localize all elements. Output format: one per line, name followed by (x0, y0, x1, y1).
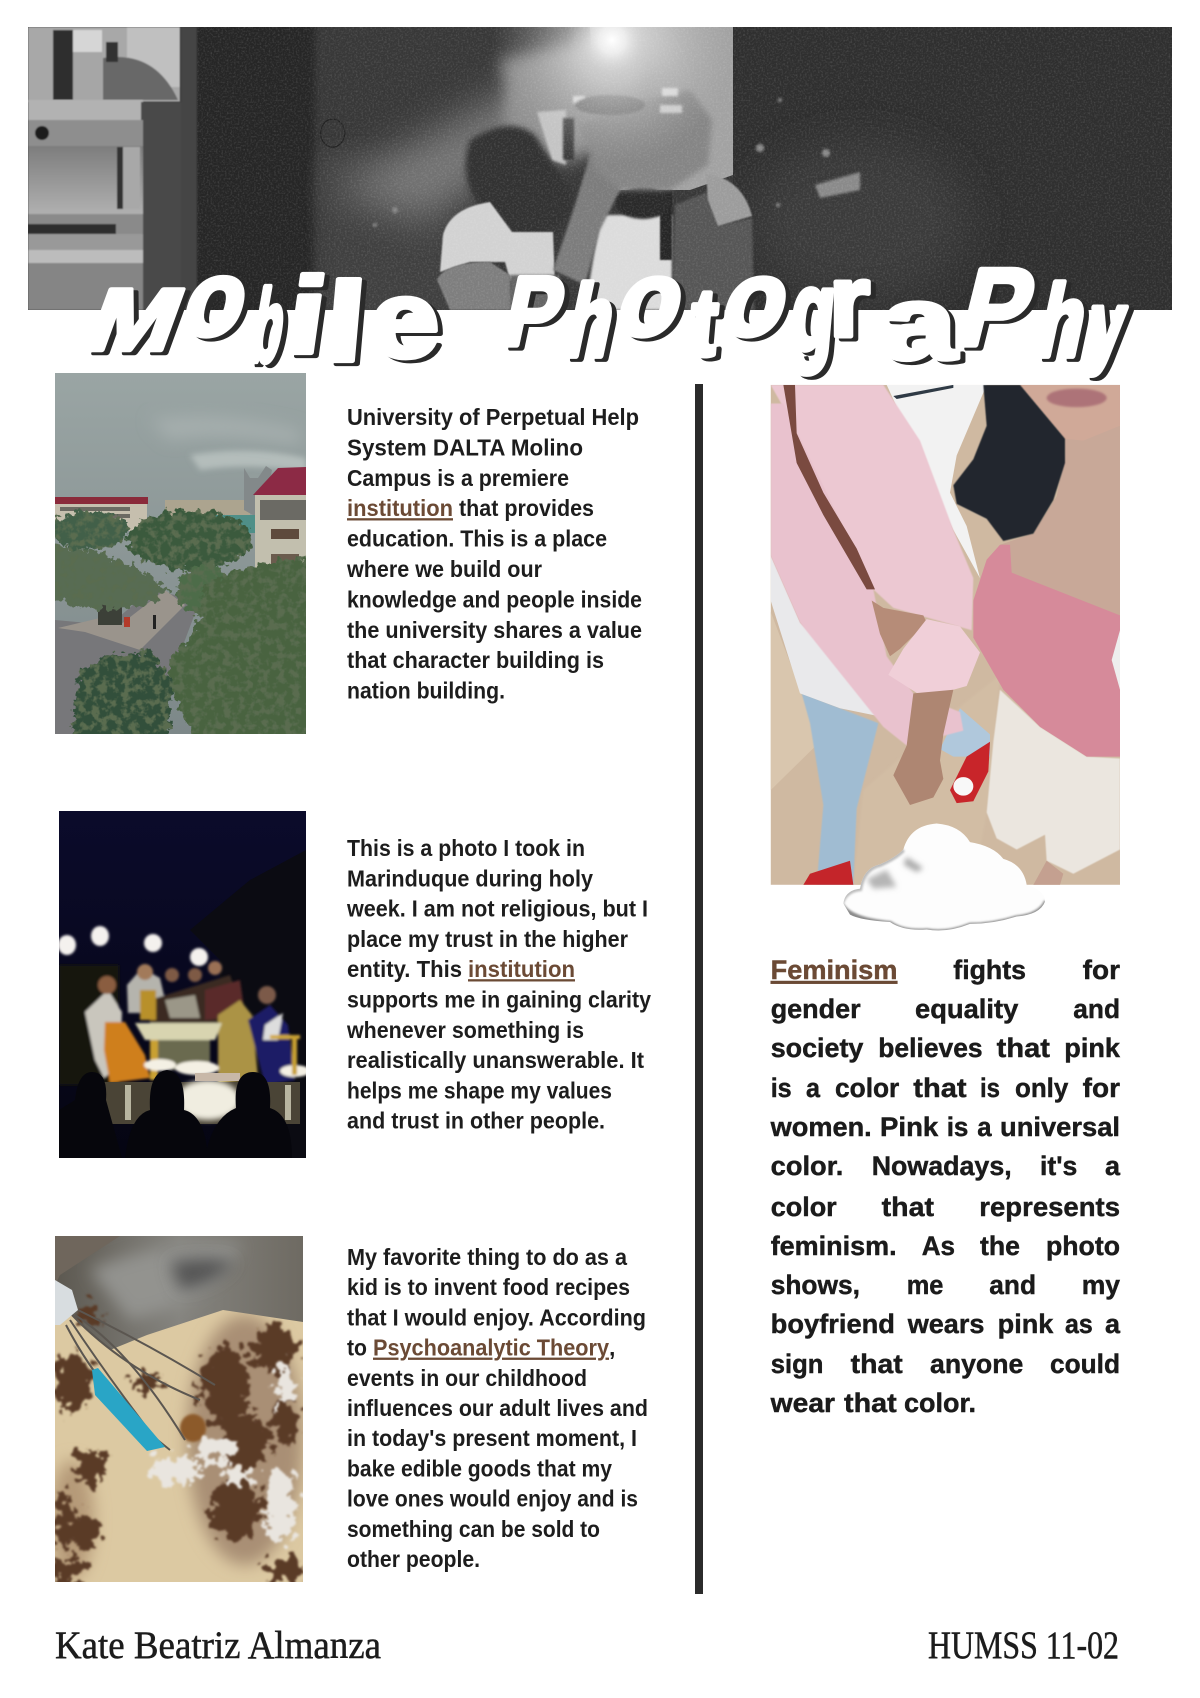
text: feminism paragraph, justified: wears (907, 1309, 984, 1339)
text: feminism paragraph, justified: a (1105, 1309, 1121, 1339)
title: Mobile Photography (75, 238, 1137, 389)
skin chest and face (1000, 385, 1120, 619)
hands with camera (580, 90, 712, 190)
brown sugar clumps (43, 1303, 305, 1582)
text: baking paragraph: in today's present moment, I (347, 1425, 637, 1451)
text: Marinduque paragraph: helps me shape my values (347, 1077, 612, 1103)
photo: baking bowl with whisk (43, 1236, 305, 1582)
text: feminism paragraph, justified: wear (770, 1388, 836, 1418)
title: Mobile Photography: b (244, 270, 293, 384)
text: feminism paragraph, justified: anyone (930, 1349, 1023, 1379)
float base (90, 1082, 300, 1124)
footer: class section: HUMSS 11-02 (928, 1624, 1119, 1667)
text: university paragraph: institution (347, 495, 453, 521)
text: university paragraph: that character building is (347, 647, 604, 673)
title: Mobile Photography: P (954, 248, 1052, 372)
bright window (887, 385, 987, 578)
text: feminism paragraph, justified: the (980, 1231, 1020, 1261)
text: feminism paragraph, justified: shows, (771, 1270, 860, 1300)
lamps (58, 926, 208, 966)
red sneaker (950, 742, 990, 803)
flour patches (150, 1363, 296, 1541)
title: Mobile Photography: l (319, 260, 372, 386)
photo: university campus (50, 373, 310, 740)
blue robe disciple (248, 1005, 295, 1085)
text: feminism paragraph, justified: believes (878, 1033, 983, 1063)
rolled cuff (888, 619, 980, 697)
text: baking paragraph (347, 1244, 648, 1572)
right dark wall (733, 27, 1172, 310)
crochet pink top (973, 545, 1120, 757)
text: feminism paragraph, justified: that (844, 1388, 897, 1418)
icon: white cloud (842, 824, 1047, 932)
left cabinet window (28, 27, 180, 102)
title: Mobile Photography: o (611, 243, 704, 361)
upper head glow area (500, 93, 592, 169)
title: Mobile Photography: t (691, 272, 727, 379)
title: Mobile Photography: a (880, 264, 958, 381)
text: Marinduque paragraph: institution (468, 956, 575, 982)
hand on arm (872, 600, 927, 656)
text: feminism paragraph, justified: could (1050, 1349, 1120, 1379)
text: feminism paragraph, justified: boyfriend (771, 1309, 895, 1339)
text: feminism paragraph, justified: is (771, 1073, 792, 1103)
title: Mobile Photography: P (500, 260, 578, 369)
title: Mobile Photography: g (786, 249, 841, 375)
title: Mobile Photography: b (249, 273, 298, 387)
text: feminism paragraph, justified: universal (1000, 1112, 1120, 1142)
text: Marinduque paragraph: whenever something is (346, 1017, 584, 1043)
floor (771, 385, 1120, 885)
vertical divider (695, 384, 703, 1594)
text: feminism paragraph, justified (770, 955, 1121, 1418)
text: feminism paragraph, justified: women. (770, 1112, 872, 1142)
text: feminism paragraph, justified: sign (771, 1349, 823, 1379)
footer: author name: Kate Beatriz Almanza (55, 1624, 381, 1667)
text: Marinduque paragraph: This is a photo I took in (347, 835, 585, 861)
text: university paragraph: education. This is a place (347, 526, 607, 552)
text: feminism paragraph, justified: fights (953, 955, 1026, 985)
silhouettes of spectators (59, 1070, 286, 1140)
title: Mobile Photography: h (1034, 267, 1103, 381)
title: Mobile Photography: o (716, 243, 809, 361)
text: baking paragraph: that I would enjoy. According (347, 1304, 646, 1330)
lit candle bowls (144, 1059, 176, 1071)
text: Marinduque paragraph: supports me in gaining clarity (347, 986, 651, 1012)
left arm (437, 262, 512, 310)
title: Mobile Photography: M (80, 273, 202, 372)
text: feminism paragraph, justified: a (806, 1073, 821, 1103)
text: baking paragraph: , (609, 1335, 615, 1361)
forearm (553, 155, 625, 285)
title: Mobile Photography: P (949, 245, 1047, 369)
title: Mobile Photography: l (324, 263, 377, 389)
right sleeve (706, 174, 752, 226)
pink shirt upper sleeve (771, 385, 973, 630)
text: baking paragraph: something can be sold to (347, 1516, 600, 1542)
orange robe disciple (104, 1022, 150, 1083)
cabinet body (28, 27, 197, 310)
text: feminism paragraph, justified: pink (998, 1309, 1054, 1339)
text: Marinduque paragraph (346, 835, 651, 1134)
whisk handle (55, 1280, 78, 1325)
text: feminism paragraph, justified: that (997, 1033, 1050, 1063)
left shirt (440, 202, 555, 285)
text: feminism paragraph, justified: that (913, 1073, 967, 1103)
title: Mobile Photography: P (495, 257, 573, 366)
text: feminism paragraph, justified: that (882, 1192, 934, 1222)
text: Marinduque paragraph: Marinduque during holy (347, 865, 593, 891)
title: Mobile Photography: o (172, 238, 263, 358)
title: Mobile Photography: e (370, 257, 440, 380)
text: university paragraph: nation building. (347, 678, 505, 704)
text: feminism paragraph, justified: equality (915, 994, 1018, 1024)
camera highlights (573, 88, 682, 115)
text: feminism paragraph, justified: as (1065, 1309, 1093, 1339)
title: Mobile Photography: t (686, 269, 722, 376)
title: Mobile Photography: a (885, 267, 963, 384)
text: feminism paragraph, justified: and (989, 1270, 1036, 1300)
whisk wires (66, 1310, 215, 1450)
text: Marinduque paragraph: and trust in other people. (347, 1108, 605, 1134)
text: Marinduque paragraph: entity. This (347, 956, 462, 982)
flash glow (500, 27, 704, 148)
text: feminism paragraph, justified: As (922, 1231, 955, 1261)
text: baking paragraph: My favorite thing to do as a (347, 1244, 627, 1270)
title: Mobile Photography: r (829, 243, 870, 358)
statues group (59, 961, 310, 1085)
white undershirt (771, 556, 880, 716)
title: Mobile Photography: o (177, 241, 268, 361)
text: feminism paragraph, justified: pink (1064, 1033, 1121, 1063)
text: Marinduque paragraph: realistically unanswerable. It (347, 1047, 644, 1073)
text: university paragraph: where we build our (346, 556, 542, 582)
text: university paragraph: knowledge and people inside (347, 586, 642, 612)
title: Mobile Photography: h (1029, 264, 1098, 378)
text: baking paragraph: to (347, 1335, 367, 1361)
text: baking paragraph: love ones would enjoy and is (347, 1486, 638, 1512)
title: Mobile Photography: i (284, 257, 340, 379)
title: Mobile Photography: i (279, 254, 335, 376)
hair (462, 122, 562, 215)
text: university paragraph: University of Perpetual Help (347, 404, 639, 430)
text: feminism paragraph, justified: is (980, 1073, 1000, 1103)
white robe disciple (85, 990, 122, 1078)
right building (255, 495, 306, 568)
text: feminism paragraph, justified: Pink (880, 1112, 939, 1142)
text: university paragraph: Campus is a premiere (347, 465, 569, 491)
bag strap (783, 385, 875, 589)
title: Mobile Photography: M (75, 270, 197, 369)
title: Mobile Photography: o (711, 240, 804, 358)
text: feminism paragraph, justified: for (1083, 1073, 1121, 1103)
photo: couple wearing pink (771, 385, 1120, 885)
right jeans leg (940, 708, 990, 757)
text: feminism paragraph, justified: represents (979, 1192, 1120, 1222)
lower mid wall tone (330, 164, 440, 307)
yellow robe disciple (218, 1000, 258, 1085)
text: feminism paragraph, justified: color (771, 1192, 837, 1222)
title: Mobile Photography: r (834, 246, 875, 361)
title: Mobile Photography: e (375, 260, 445, 383)
white pants (987, 690, 1120, 874)
text: feminism paragraph, justified: it's (1040, 1151, 1077, 1181)
feminism link word: Feminism (771, 955, 897, 985)
text: university paragraph: System DALTA Molino (347, 434, 583, 460)
text: baking paragraph: events in our childhood (347, 1365, 587, 1391)
tree canopies (50, 510, 310, 740)
table (135, 1023, 222, 1040)
text: feminism paragraph, justified: color. (904, 1388, 976, 1418)
hero photo: mirror selfie in black and white (28, 27, 1172, 310)
text: Marinduque paragraph: place my trust in the higher (347, 926, 628, 952)
text: baking paragraph: bake edible goods that my (347, 1455, 612, 1481)
dark wardrobe column (196, 27, 316, 310)
text: feminism paragraph, justified: feminism. (771, 1231, 897, 1261)
text: university paragraph: the university shares a value (347, 617, 642, 643)
forearm and clasped hands (893, 690, 953, 805)
text: baking paragraph: other people. (347, 1546, 480, 1572)
mask (537, 110, 566, 165)
distant buildings (165, 500, 250, 516)
beard shadow (615, 187, 660, 221)
text: feminism paragraph, justified: only (1015, 1073, 1068, 1103)
hair (953, 385, 1065, 541)
text: feminism paragraph, justified: gender (771, 994, 861, 1024)
text: feminism paragraph, justified: color (835, 1073, 900, 1103)
text: baking paragraph: influences our adult lives and (347, 1395, 648, 1421)
text: university paragraph (346, 404, 642, 704)
title: Mobile Photography: y (1088, 276, 1137, 379)
text: feminism paragraph, justified: that (851, 1349, 903, 1379)
photo: holy week procession at night (58, 811, 310, 1158)
metal bowl (55, 1236, 303, 1350)
left jeans leg (802, 693, 878, 885)
title: Mobile Photography: o (606, 240, 699, 358)
text: feminism paragraph, justified: is (947, 1112, 968, 1142)
pink shirt body (771, 403, 963, 745)
light beam (334, 76, 560, 233)
text: feminism paragraph, justified: photo (1046, 1231, 1120, 1261)
center shirt (585, 215, 672, 310)
text: feminism paragraph, justified: a (1105, 1151, 1121, 1181)
right arm (672, 190, 754, 310)
text: feminism paragraph, justified: society (771, 1033, 863, 1063)
dust specks (373, 98, 860, 227)
plaza and road (55, 590, 200, 734)
blue spatula (92, 1368, 165, 1451)
text: Marinduque paragraph: week. I am not religious, but I (346, 896, 648, 922)
text: baking paragraph: Psychoanalytic Theory (373, 1335, 609, 1361)
title: Mobile Photography: y (1083, 273, 1132, 376)
text: feminism paragraph, justified: for (1083, 955, 1121, 985)
title: Mobile Photography: g (791, 252, 846, 378)
text: feminism paragraph, justified: and (1073, 994, 1120, 1024)
title: Mobile Photography: h (557, 264, 626, 378)
text: feminism paragraph, justified: me (907, 1270, 943, 1300)
text: feminism paragraph, justified: color. (771, 1151, 843, 1181)
text: baking paragraph: kid is to invent food recipes (347, 1274, 630, 1300)
film grain (197, 27, 1172, 310)
text: feminism paragraph, justified: a (977, 1112, 993, 1142)
text: university paragraph: that provides (459, 495, 594, 521)
strap (660, 190, 672, 260)
mixed sugar underlay (187, 1315, 303, 1565)
title: Mobile Photography: h (562, 267, 631, 381)
text: feminism paragraph, justified: Nowadays, (872, 1151, 1012, 1181)
bright door panel (590, 27, 733, 190)
text: feminism paragraph, justified: my (1082, 1270, 1120, 1300)
